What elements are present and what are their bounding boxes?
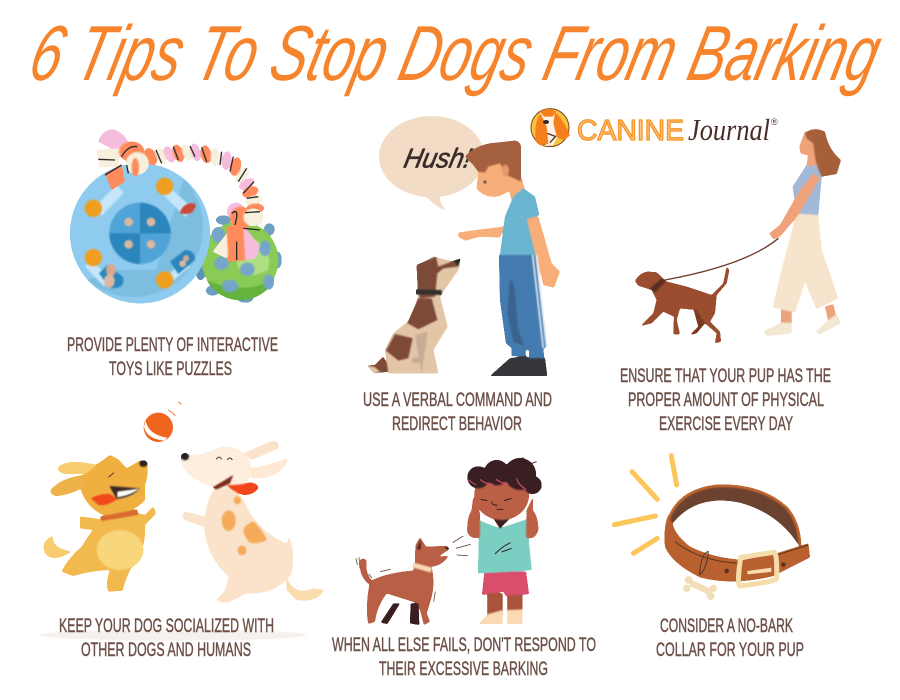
icon: green ball xyxy=(196,215,282,303)
ball xyxy=(144,402,181,442)
caption: toys xyxy=(67,335,278,380)
shine rays xyxy=(614,456,677,553)
illustration: woman walking dog xyxy=(635,129,841,343)
yellow dog xyxy=(44,455,156,592)
barking dog xyxy=(356,536,471,625)
caption: exercise: EXERCISE EVERY DAY xyxy=(659,414,793,435)
illustration: puzzle toy with rope and green ball xyxy=(70,129,282,303)
caption: collar xyxy=(656,616,804,661)
sitting dog xyxy=(367,257,461,373)
cream dog xyxy=(181,441,324,603)
speech bubble xyxy=(379,116,484,211)
bone tag xyxy=(683,576,717,600)
walking dog xyxy=(635,267,729,343)
caption: exercise xyxy=(620,366,831,435)
illustration: child covering ears with barking dog xyxy=(356,457,542,625)
illustration: no-bark collar xyxy=(614,456,810,600)
caption: verbal command: USE A VERBAL COMMAND AND xyxy=(363,390,552,411)
caption: do not respond: THEIR EXCESSIVE BARKING xyxy=(379,659,548,680)
icon: rope xyxy=(97,129,264,262)
bark marks xyxy=(356,536,471,602)
caption: do not respond xyxy=(332,635,596,680)
caption: socialized: KEEP YOUR DOG SOCIALIZED WITH xyxy=(59,616,274,637)
boy xyxy=(458,141,560,376)
dog faces xyxy=(108,457,232,477)
icon: blue puzzle toy xyxy=(70,163,210,303)
caption: collar: COLLAR FOR YOUR PUP xyxy=(656,640,804,661)
child face and hair details xyxy=(468,478,526,489)
logo: Canine Journal xyxy=(531,109,778,147)
illustration: boy with sitting dog xyxy=(367,116,560,376)
caption: toys: PROVIDE PLENTY OF INTERACTIVE xyxy=(67,335,278,356)
illustration: two dogs playing xyxy=(40,402,324,641)
caption: socialized: OTHER DOGS AND HUMANS xyxy=(81,640,251,661)
caption: socialized xyxy=(59,616,274,661)
rope knot right with tassels xyxy=(213,203,263,262)
logo: Canine Journal: Journal xyxy=(688,112,770,147)
logo: Canine Journal: ® xyxy=(771,117,778,127)
ground shadow xyxy=(40,629,307,641)
caption: verbal command: REDIRECT BEHAVIOR xyxy=(392,414,522,435)
woman xyxy=(763,129,841,336)
rope dark strand lines xyxy=(98,146,260,260)
caption: do not respond: WHEN ALL ELSE FAILS, DON'T RESPOND TO xyxy=(332,635,596,656)
buckle xyxy=(738,552,777,586)
rope strands xyxy=(142,142,264,214)
logo wordmark: CANINE xyxy=(577,115,684,147)
child xyxy=(467,457,542,624)
caption: collar: CONSIDER A NO-BARK xyxy=(660,616,793,637)
leash xyxy=(665,238,778,280)
speech bubble: Hush! xyxy=(401,143,475,174)
caption: verbal command xyxy=(363,390,552,435)
logo badge xyxy=(531,109,570,147)
collar xyxy=(665,485,810,600)
rope knot left with tassels xyxy=(97,129,149,190)
caption: toys: TOYS LIKE PUZZLES xyxy=(109,359,232,380)
